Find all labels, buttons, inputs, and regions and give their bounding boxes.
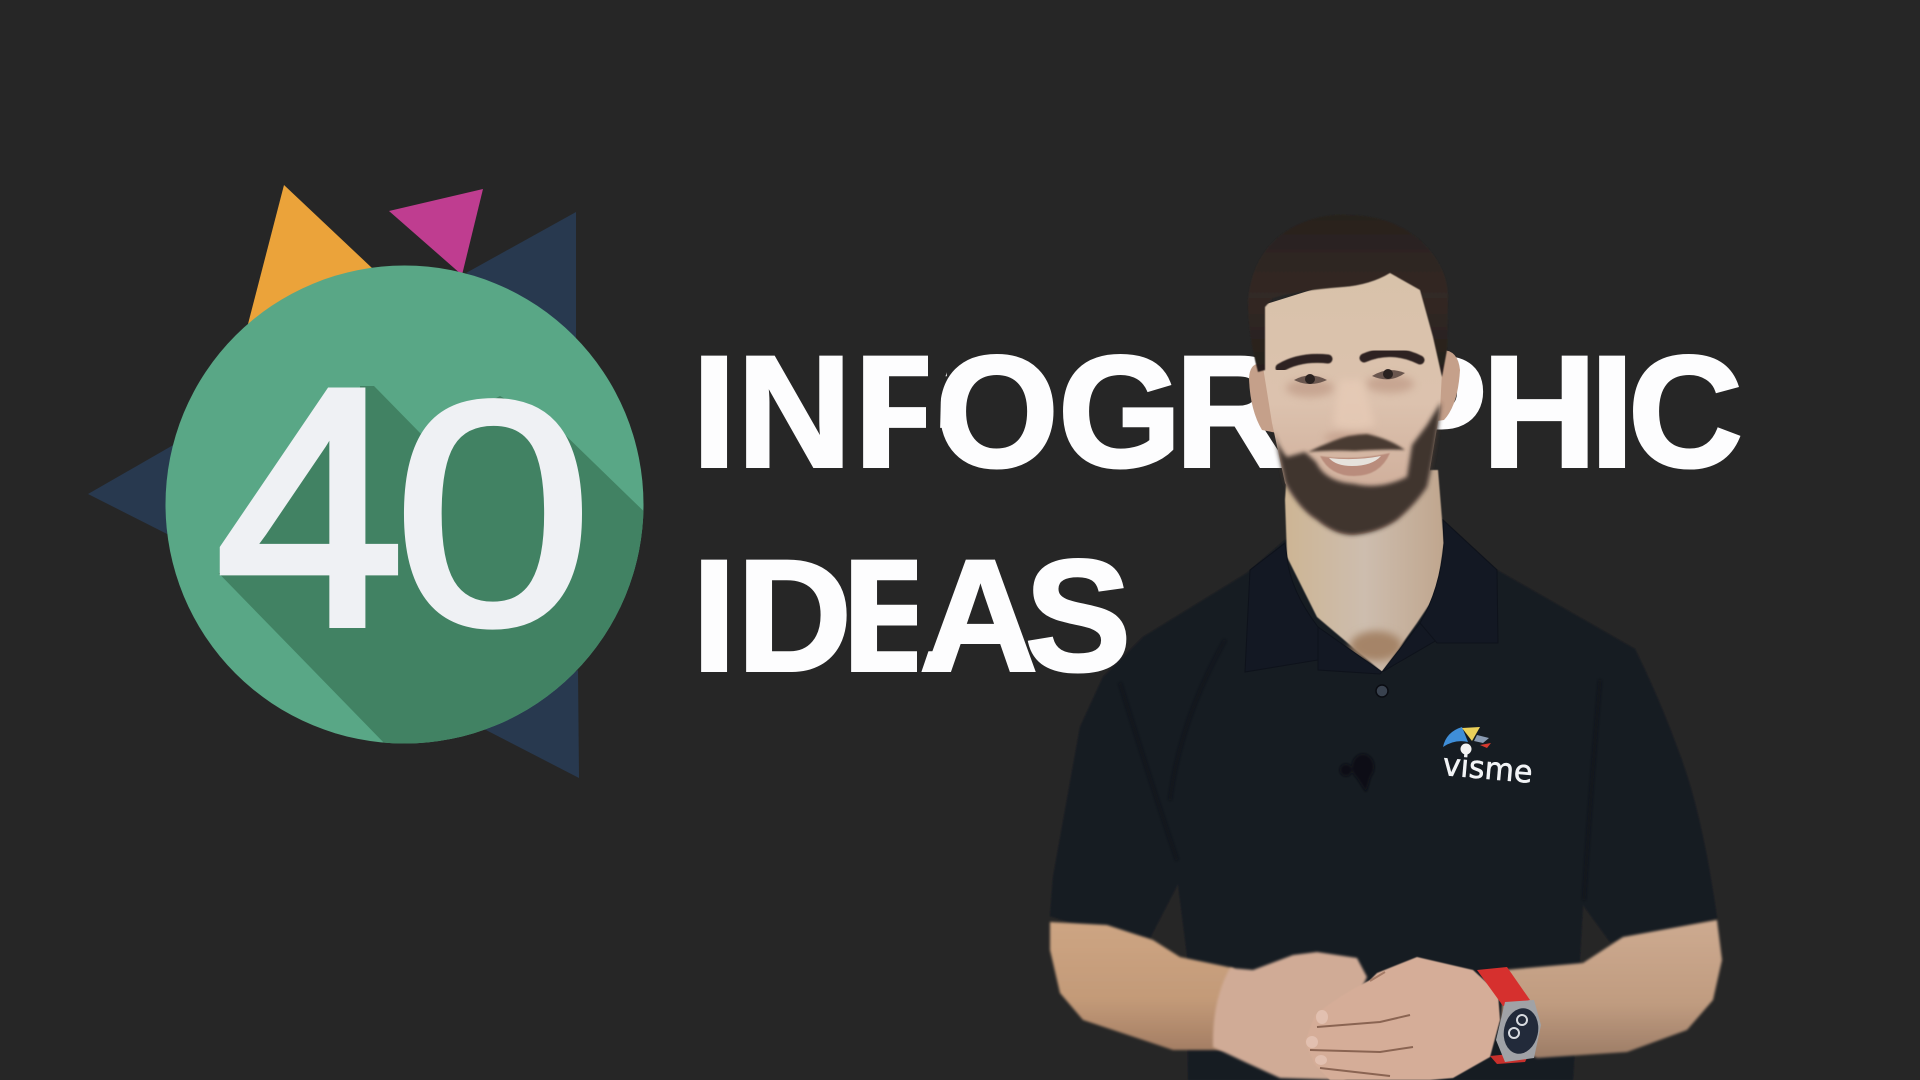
right hand — [1305, 957, 1500, 1080]
badge: 40 on green circle with triangles — [88, 185, 660, 778]
title — [692, 322, 1743, 704]
shirt logo — [1441, 727, 1534, 791]
polo shirt — [1050, 520, 1717, 1080]
triangle: magenta — [389, 189, 483, 275]
right eye — [1372, 370, 1405, 379]
title text — [692, 322, 1743, 704]
presenter — [1050, 215, 1722, 1080]
right pupil — [1383, 369, 1393, 379]
placket — [1318, 623, 1437, 674]
eyes — [1294, 369, 1405, 384]
nose — [1333, 380, 1375, 430]
letter trims keeping F and E narrow — [917, 350, 962, 676]
chest hair — [1350, 631, 1402, 661]
right ear — [1430, 350, 1460, 422]
watch subdials — [1509, 1015, 1527, 1038]
logo mark — [1443, 727, 1468, 747]
green circle — [166, 266, 644, 744]
neck — [1285, 470, 1444, 672]
ears — [1249, 350, 1460, 434]
shirt folds — [1120, 640, 1600, 900]
digit 4: 4 — [216, 318, 404, 696]
triangle: navy left — [88, 444, 175, 538]
collar left flap — [1245, 543, 1318, 672]
arms and hands — [1050, 920, 1722, 1080]
triangle: orange — [248, 185, 372, 324]
logo wordmark: visme — [1441, 747, 1534, 791]
left hand — [1213, 952, 1367, 1080]
lapel microphone — [1340, 754, 1374, 792]
head — [1263, 270, 1442, 535]
collar — [1245, 520, 1498, 674]
mouth — [1320, 453, 1390, 476]
watch strap — [1477, 967, 1530, 1006]
shirt button — [1376, 685, 1388, 697]
watch dial — [1500, 1005, 1542, 1057]
left eye — [1294, 376, 1327, 384]
collar right flap — [1420, 520, 1498, 643]
lower lip — [1320, 453, 1390, 476]
long shadow — [218, 386, 660, 745]
fingers — [1310, 972, 1413, 1076]
teeth — [1329, 456, 1381, 466]
title line 2: IDEAS — [692, 526, 1131, 704]
moustache — [1308, 434, 1405, 452]
title line 1: INFOGRAPHIC — [692, 322, 1743, 500]
left forearm — [1050, 922, 1255, 1050]
eye shadows — [1286, 375, 1414, 444]
digit 0: 0 — [393, 335, 593, 693]
finger nails — [1306, 1010, 1328, 1065]
beard — [1272, 402, 1441, 535]
eyebrows — [1280, 352, 1420, 368]
hair — [1248, 215, 1448, 377]
triangle: navy top right — [466, 212, 576, 340]
left ear — [1249, 364, 1282, 434]
left pupil — [1305, 374, 1315, 384]
watch — [1477, 967, 1542, 1064]
watch case — [1496, 1000, 1541, 1062]
triangle: navy bottom right — [484, 670, 579, 778]
number 40 — [216, 318, 593, 696]
right forearm — [1500, 920, 1722, 1058]
